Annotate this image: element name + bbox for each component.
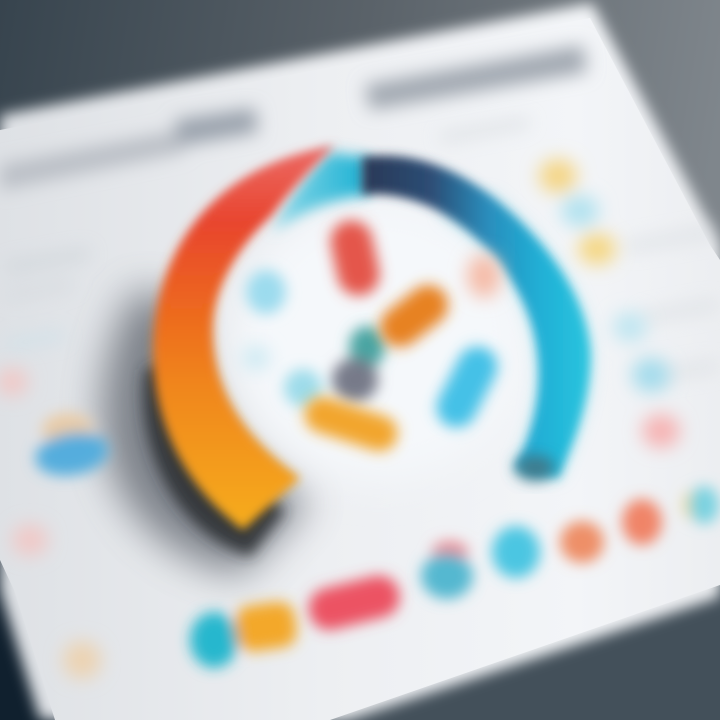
icon: left stacked donut <box>32 413 112 481</box>
marker: orange dot <box>560 521 604 563</box>
gauge glow: right cyan halo <box>440 195 590 478</box>
marker: blue dot <box>492 526 540 578</box>
icon: faint left markers <box>0 368 101 679</box>
marker: red dot <box>622 499 662 545</box>
icon: small pale marker <box>242 346 270 370</box>
chart: bottom small markers <box>421 486 719 599</box>
chart: bottom colour strip <box>190 571 404 668</box>
marker: teal and yellow dot <box>683 486 719 524</box>
gauge shadow <box>102 290 310 575</box>
strip: teal cap <box>190 612 238 668</box>
gauge segment: cyan <box>272 152 368 232</box>
heading: blurred right title <box>365 45 587 110</box>
text block: faint right column <box>440 117 719 383</box>
icon: orange pill <box>372 277 456 355</box>
gauge segment: navy to blue to cyan <box>362 155 590 478</box>
gauge segment: red to orange to yellow <box>153 145 335 530</box>
icon: inner gauge light disc <box>233 200 523 480</box>
gauge end cap <box>515 455 555 481</box>
chart: gauge arc <box>153 145 590 530</box>
icon: red pill <box>327 216 383 300</box>
marker: mixed donut <box>421 541 473 599</box>
icon: centre hub <box>284 326 385 407</box>
icon: light blue marker <box>246 270 286 314</box>
legend: right column markers <box>539 159 680 448</box>
icon: blue pill <box>430 340 504 434</box>
icon: yellow-orange pill <box>300 392 402 456</box>
text block: faint left column <box>5 247 91 350</box>
icon: peach marker <box>467 254 501 298</box>
strip: amber bar <box>233 600 299 654</box>
strip: coral bar <box>304 571 404 634</box>
heading: blurred left title <box>0 108 258 190</box>
